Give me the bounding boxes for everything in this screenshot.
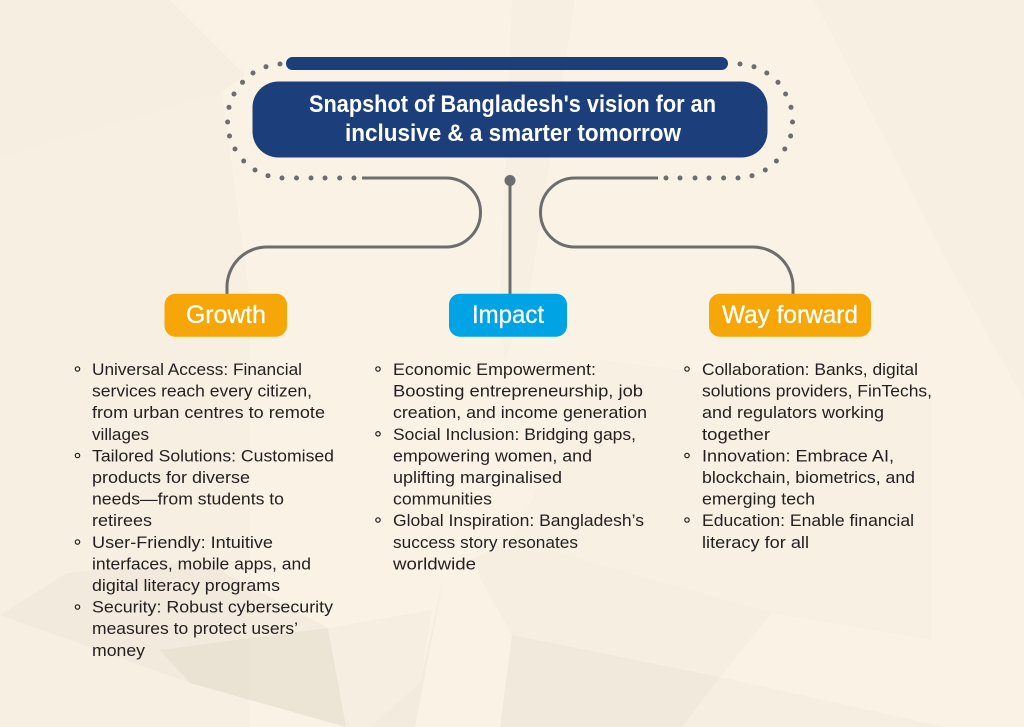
list: Growth — [75, 360, 334, 660]
list: Growth: Security: Robust cybersecurity — [92, 598, 334, 617]
list: Growth: User-Friendly: Intuitive — [92, 533, 273, 552]
title banner: inclusive & a smarter tomorrow — [345, 120, 681, 147]
list: Impact: creation, and income generation — [393, 403, 647, 422]
list: Impact: uplifting marginalised — [393, 468, 562, 487]
list: Way forward: and regulators working — [702, 403, 884, 422]
list: Growth: villages — [92, 425, 149, 444]
heading: Impact: Impact — [472, 301, 544, 329]
list: Impact: communities — [393, 490, 492, 509]
list: Growth: interfaces, mobile apps, and — [92, 554, 311, 573]
heading: Impact — [449, 294, 567, 337]
list: Impact: Social Inclusion: Bridging gaps, — [393, 425, 636, 444]
list: Way forward: blockchain, biometrics, and — [702, 468, 915, 487]
list: Impact: Boosting entrepreneurship, job — [393, 382, 643, 401]
connector: title to Way forward — [540, 178, 793, 294]
list: Growth: products for diverse — [92, 468, 250, 487]
list: Growth: retirees — [92, 511, 152, 530]
list: Impact: Economic Empowerment: — [393, 360, 596, 379]
list: Growth: Universal Access: Financial — [92, 360, 302, 379]
list: Growth: digital literacy programs — [92, 576, 280, 595]
title banner: Snapshot of Bangladesh's vision for an — [309, 91, 716, 118]
list: Growth: money — [92, 641, 146, 660]
title banner — [252, 82, 768, 158]
list: Way forward: Education: Enable financial — [702, 511, 914, 530]
list: Way forward: solutions providers, FinTechs, — [702, 382, 932, 401]
list: Way forward: emerging tech — [702, 490, 815, 509]
list: Way forward: literacy for all — [702, 533, 809, 552]
list: Impact: success story resonates — [393, 533, 578, 552]
list: Impact: Global Inspiration: Bangladesh’s — [393, 511, 644, 530]
list: Way forward — [685, 360, 932, 552]
list: Way forward: Collaboration: Banks, digital — [702, 360, 918, 379]
list: Way forward: Innovation: Embrace AI, — [702, 446, 894, 465]
list: Way forward: together — [702, 425, 770, 444]
list: Growth: measures to protect users’ — [92, 619, 298, 638]
connector: title to Impact — [504, 175, 516, 294]
heading: Growth — [164, 294, 287, 337]
list: Impact — [376, 360, 647, 573]
list: Growth: from urban centres to remote — [92, 403, 325, 422]
list: Growth: needs—from students to — [92, 490, 284, 509]
dotted frame around the title — [225, 62, 795, 180]
list: Impact: empowering women, and — [393, 446, 592, 465]
list: Growth: services reach every citizen, — [92, 382, 312, 401]
list: Impact: worldwide — [392, 554, 476, 573]
connector: title to Growth — [227, 178, 480, 294]
heading: Growth: Growth — [186, 301, 266, 329]
top accent bar — [286, 57, 728, 70]
heading: Way forward: Way forward — [722, 301, 858, 329]
heading: Way forward — [709, 294, 871, 337]
list: Growth: Tailored Solutions: Customised — [92, 446, 334, 465]
